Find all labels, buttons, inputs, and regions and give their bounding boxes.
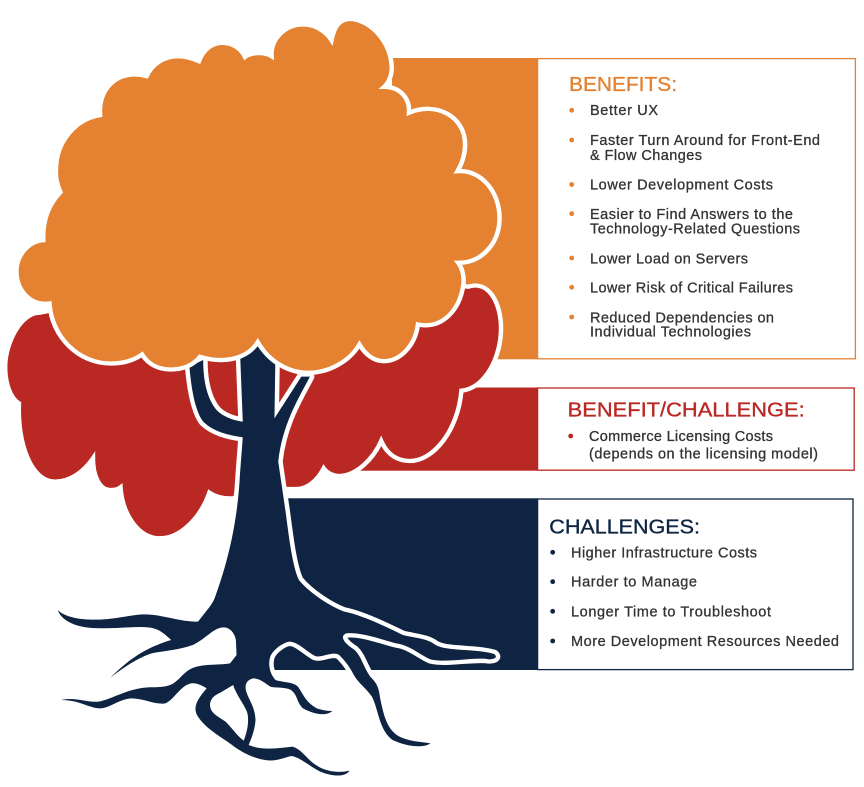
panel: benefit/challenge band [345,388,538,471]
benefit/challenge list: (depends on the licensing model) [589,447,818,463]
red tree canopy [5,267,501,538]
benefits list: Reduced Dependencies on [590,310,774,326]
benefits list: Better UX [590,103,658,119]
challenges list: Longer Time to Troubleshoot [571,604,771,620]
benefits list: & Flow Changes [590,148,702,164]
benefit/challenge list: Commerce Licensing Costs [589,429,773,445]
benefits list: Individual Technologies [590,325,751,341]
benefits list [569,103,820,341]
panel: benefits [538,59,855,359]
heading: challenges: CHALLENGES: [549,515,700,538]
benefits list: Lower Risk of Critical Failures [590,281,793,297]
challenges list: Harder to Manage [571,575,697,591]
benefits list: Easier to Find Answers to the [590,207,793,223]
tree trunk and roots [58,337,496,776]
panel: benefit/challenge [538,388,854,470]
panel: challenges [538,499,853,670]
orange tree canopy [16,19,500,373]
benefits list: Lower Development Costs [590,177,773,193]
panel: challenges band [270,498,538,670]
benefits list: Faster Turn Around for Front-End [590,133,820,149]
heading: benefit/challenge: BENEFIT/CHALLENGE: [568,399,805,422]
challenges list [550,545,839,650]
benefit/challenge list [568,429,818,463]
heading: benefits: BENEFITS: [569,73,677,96]
panel: benefits band [392,58,538,359]
challenges list: Higher Infrastructure Costs [571,545,757,561]
benefits list: Lower Load on Servers [590,251,748,267]
challenges list: More Development Resources Needed [571,634,839,650]
benefits list: Technology-Related Questions [590,222,800,238]
